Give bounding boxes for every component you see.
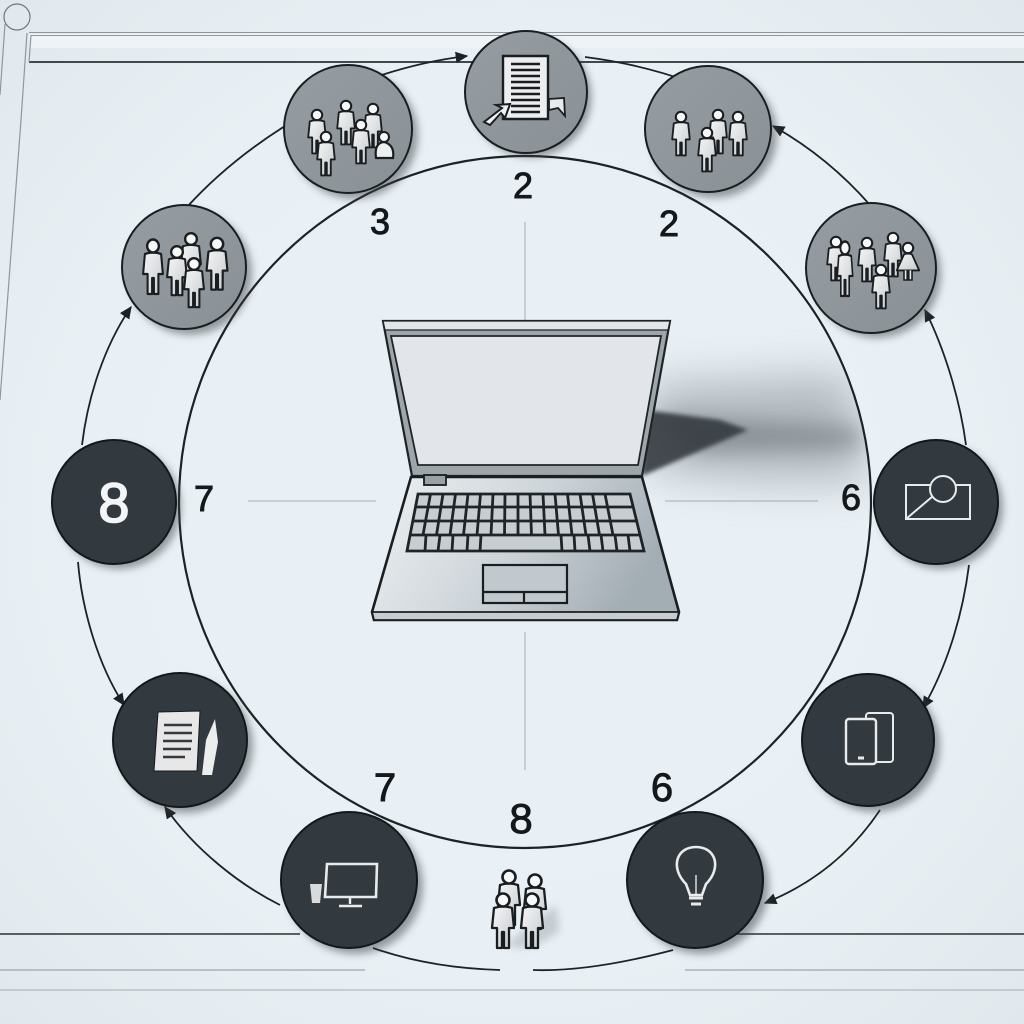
node: document top xyxy=(465,31,591,157)
outer ring arrows xyxy=(78,56,969,970)
ring numbers: 6 xyxy=(651,766,673,810)
ring numbers: 7 xyxy=(374,766,396,810)
laptop xyxy=(372,321,679,620)
laptop base xyxy=(372,477,679,620)
ring numbers: 6 xyxy=(841,477,861,518)
ring numbers: 3 xyxy=(370,201,390,242)
ring numbers: 2 xyxy=(513,165,533,206)
node: people top right xyxy=(645,66,777,198)
node: document and pen xyxy=(113,673,253,813)
icon: people bottom xyxy=(492,870,560,948)
node: number 8: 8 xyxy=(98,471,130,534)
node: phones xyxy=(802,674,940,812)
node: people right xyxy=(806,203,941,338)
laptop shadow xyxy=(642,375,870,480)
inner circle xyxy=(179,156,871,848)
crosshair guide lines xyxy=(248,222,818,770)
laptop screen xyxy=(383,321,670,476)
node: people top left xyxy=(284,65,418,199)
node: image icon right xyxy=(874,440,1003,569)
ring numbers: 7 xyxy=(194,478,214,519)
node: monitor xyxy=(281,812,423,954)
trackpad xyxy=(483,565,567,603)
ring numbers: 2 xyxy=(659,203,679,244)
node: people left xyxy=(122,205,252,335)
node: number 8 xyxy=(52,440,181,569)
ring numbers: 8 xyxy=(509,795,533,842)
node: light bulb xyxy=(627,812,769,954)
keyboard xyxy=(407,494,644,551)
ring numbers xyxy=(194,165,861,842)
